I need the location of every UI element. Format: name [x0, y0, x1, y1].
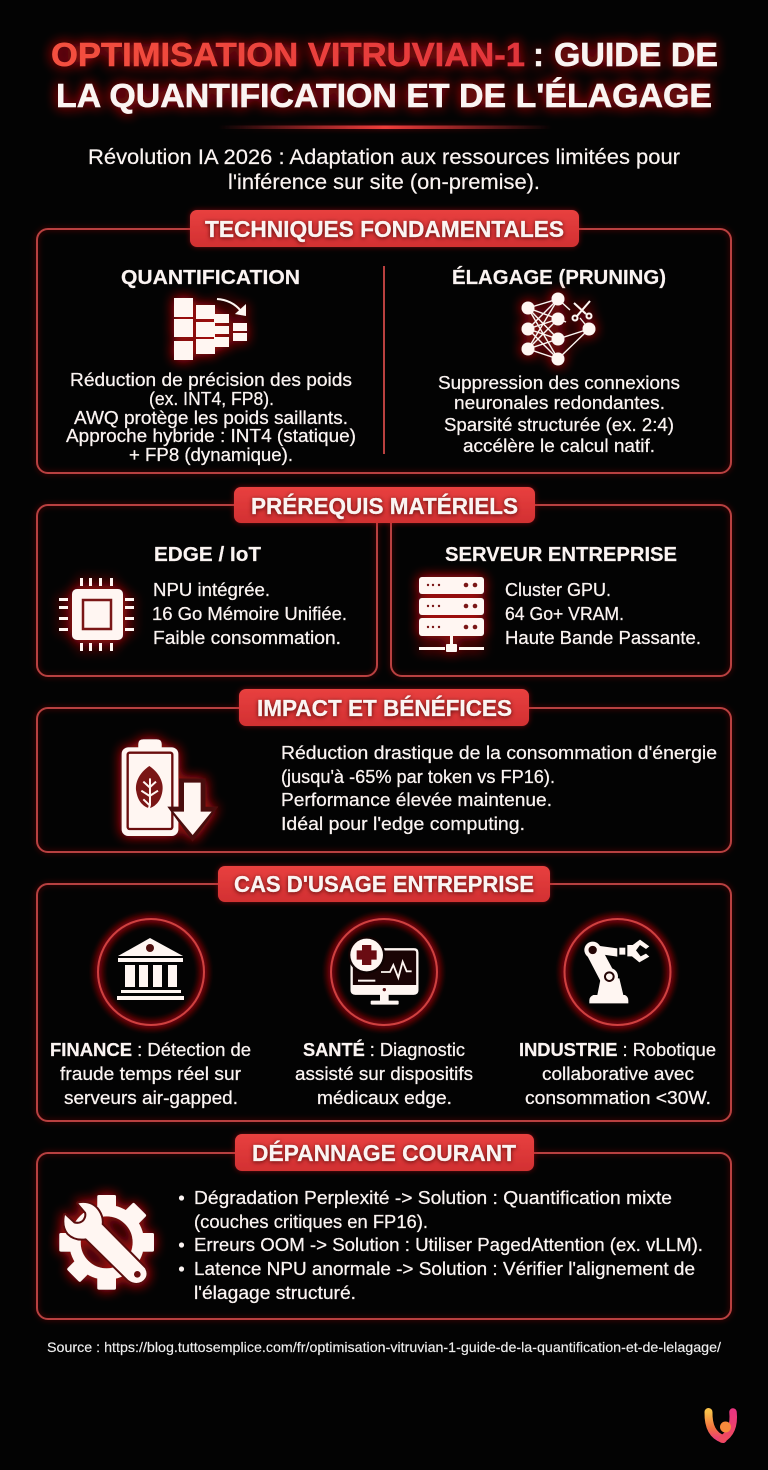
section badge: cas d'usage: CAS D'USAGE ENTREPRISE — [234, 871, 534, 897]
subtitle: Révolution IA 2026 : Adaptation aux ressources limitées pour — [88, 146, 680, 169]
text: élagage: accélère le calcul natif. — [463, 435, 655, 456]
text: quantification: (ex. INT4, FP8). — [149, 388, 274, 409]
title: LA QUANTIFICATION ET DE L'ÉLAGAGE — [56, 77, 712, 114]
title rule — [218, 126, 552, 129]
text: edge: NPU intégrée. — [153, 579, 270, 600]
icon: quantization blocks — [174, 298, 247, 360]
icon: battery with leaf and down arrow — [122, 739, 218, 842]
text: impact: Performance élevée maintenue. — [281, 789, 552, 810]
list: troubleshooting: Dégradation Perplexité -> Solution : Quantification mixte — [194, 1187, 672, 1208]
panel: dépannage courant — [37, 1134, 731, 1319]
heading: serveur: SERVEUR ENTREPRISE — [445, 544, 677, 566]
text: industrie: INDUSTRIE : Robotique — [519, 1039, 716, 1060]
text: quantification: + FP8 (dynamique). — [129, 444, 293, 465]
column: finance — [50, 919, 251, 1108]
title: OPTIMISATION VITRUVIAN-1 — [51, 36, 525, 73]
source line: Source : https://blog.tuttosemplice.com/fr/optimisation-vitruvian-1-guide-de-la-quantification-et-de-lelagage/ — [47, 1339, 721, 1355]
text: santé: assisté sur dispositifs — [295, 1063, 473, 1084]
text: santé: médicaux edge. — [317, 1087, 452, 1108]
heading: edge: EDGE / IoT — [154, 544, 261, 566]
title — [51, 36, 718, 114]
text: élagage: neuronales redondantes. — [454, 392, 665, 413]
title: : — [533, 36, 544, 73]
column: santé — [295, 919, 473, 1108]
text: quantification — [66, 369, 356, 465]
column: industrie — [519, 919, 716, 1108]
heading: élagage: ÉLAGAGE (PRUNING) — [452, 266, 666, 289]
panel: impact et bénéfices — [37, 689, 731, 852]
text: élagage — [438, 372, 680, 456]
section badge: techniques: TECHNIQUES FONDAMENTALES — [205, 216, 564, 242]
text: élagage: Suppression des connexions — [438, 372, 680, 393]
subtitle: l'inférence sur site (on-premise). — [228, 171, 540, 194]
text: finance: serveurs air-gapped. — [64, 1087, 238, 1108]
section badge: impact — [239, 689, 529, 726]
icon: chip — [59, 578, 134, 651]
panel: prérequis matériels — [37, 487, 731, 676]
text: edge: 16 Go Mémoire Unifiée. — [152, 603, 347, 624]
subtitle — [88, 146, 680, 194]
card: edge iot — [37, 505, 377, 676]
text: industrie — [519, 1039, 716, 1108]
title: GUIDE DE — [554, 36, 718, 73]
icon: neural network with scissors — [522, 292, 596, 366]
text: santé: SANTÉ : Diagnostic — [303, 1039, 465, 1060]
list: troubleshooting: Erreurs OOM -> Solution : Utiliser PagedAttention (ex. vLLM). — [194, 1234, 703, 1255]
text: edge — [152, 579, 347, 648]
text: serveur: Haute Bande Passante. — [505, 627, 701, 648]
text: serveur: Cluster GPU. — [505, 579, 611, 600]
text: quantification: Réduction de précision des poids — [70, 369, 352, 390]
text: quantification: Approche hybride : INT4 (statique) — [66, 425, 356, 446]
icon: gear and wrench — [59, 1195, 154, 1290]
text: impact: (jusqu'à -65% par token vs FP16). — [281, 766, 555, 787]
icon: bank in circle — [98, 919, 204, 1025]
panel: techniques fondamentales — [37, 210, 731, 473]
text: impact: Réduction drastique de la consommation d'énergie — [281, 742, 717, 763]
text: serveur: 64 Go+ VRAM. — [505, 603, 624, 624]
heading: quantification: QUANTIFICATION — [121, 267, 300, 289]
section badge: techniques — [190, 210, 579, 247]
panel: cas d'usage entreprise — [37, 866, 731, 1121]
list: troubleshooting: l'élagage structuré. — [194, 1282, 356, 1303]
icon: server — [419, 577, 484, 652]
text: serveur — [505, 579, 701, 648]
text: industrie: consommation <30W. — [525, 1087, 711, 1108]
text: edge: Faible consommation. — [153, 627, 341, 648]
text: élagage: Sparsité structurée (ex. 2:4) — [444, 414, 674, 435]
text: santé — [295, 1039, 473, 1108]
section badge: prérequis — [234, 487, 535, 523]
text: finance: fraude temps réel sur — [60, 1063, 241, 1084]
list: troubleshooting: (couches critiques en FP16). — [194, 1211, 428, 1232]
text: quantification: AWQ protège les poids saillants. — [74, 407, 348, 428]
text: finance — [50, 1039, 251, 1108]
section badge: cas d'usage — [218, 866, 550, 902]
list: troubleshooting — [179, 1187, 703, 1303]
icon: medical monitor in circle — [331, 919, 437, 1025]
text: industrie: collaborative avec — [542, 1063, 694, 1084]
icon: robot arm in circle — [564, 919, 670, 1025]
icon: logo — [708, 1412, 733, 1439]
text: impact — [281, 742, 717, 834]
card: serveur entreprise — [391, 505, 731, 676]
section badge: dépannage — [235, 1134, 534, 1171]
section badge: impact: IMPACT ET BÉNÉFICES — [257, 694, 512, 721]
section badge: prérequis: PRÉREQUIS MATÉRIELS — [251, 492, 518, 519]
text: impact: Idéal pour l'edge computing. — [281, 813, 525, 834]
text: finance: FINANCE : Détection de — [50, 1039, 251, 1060]
list: troubleshooting: Latence NPU anormale -> Solution : Vérifier l'alignement de — [194, 1258, 695, 1279]
section badge: dépannage: DÉPANNAGE COURANT — [252, 1139, 516, 1166]
